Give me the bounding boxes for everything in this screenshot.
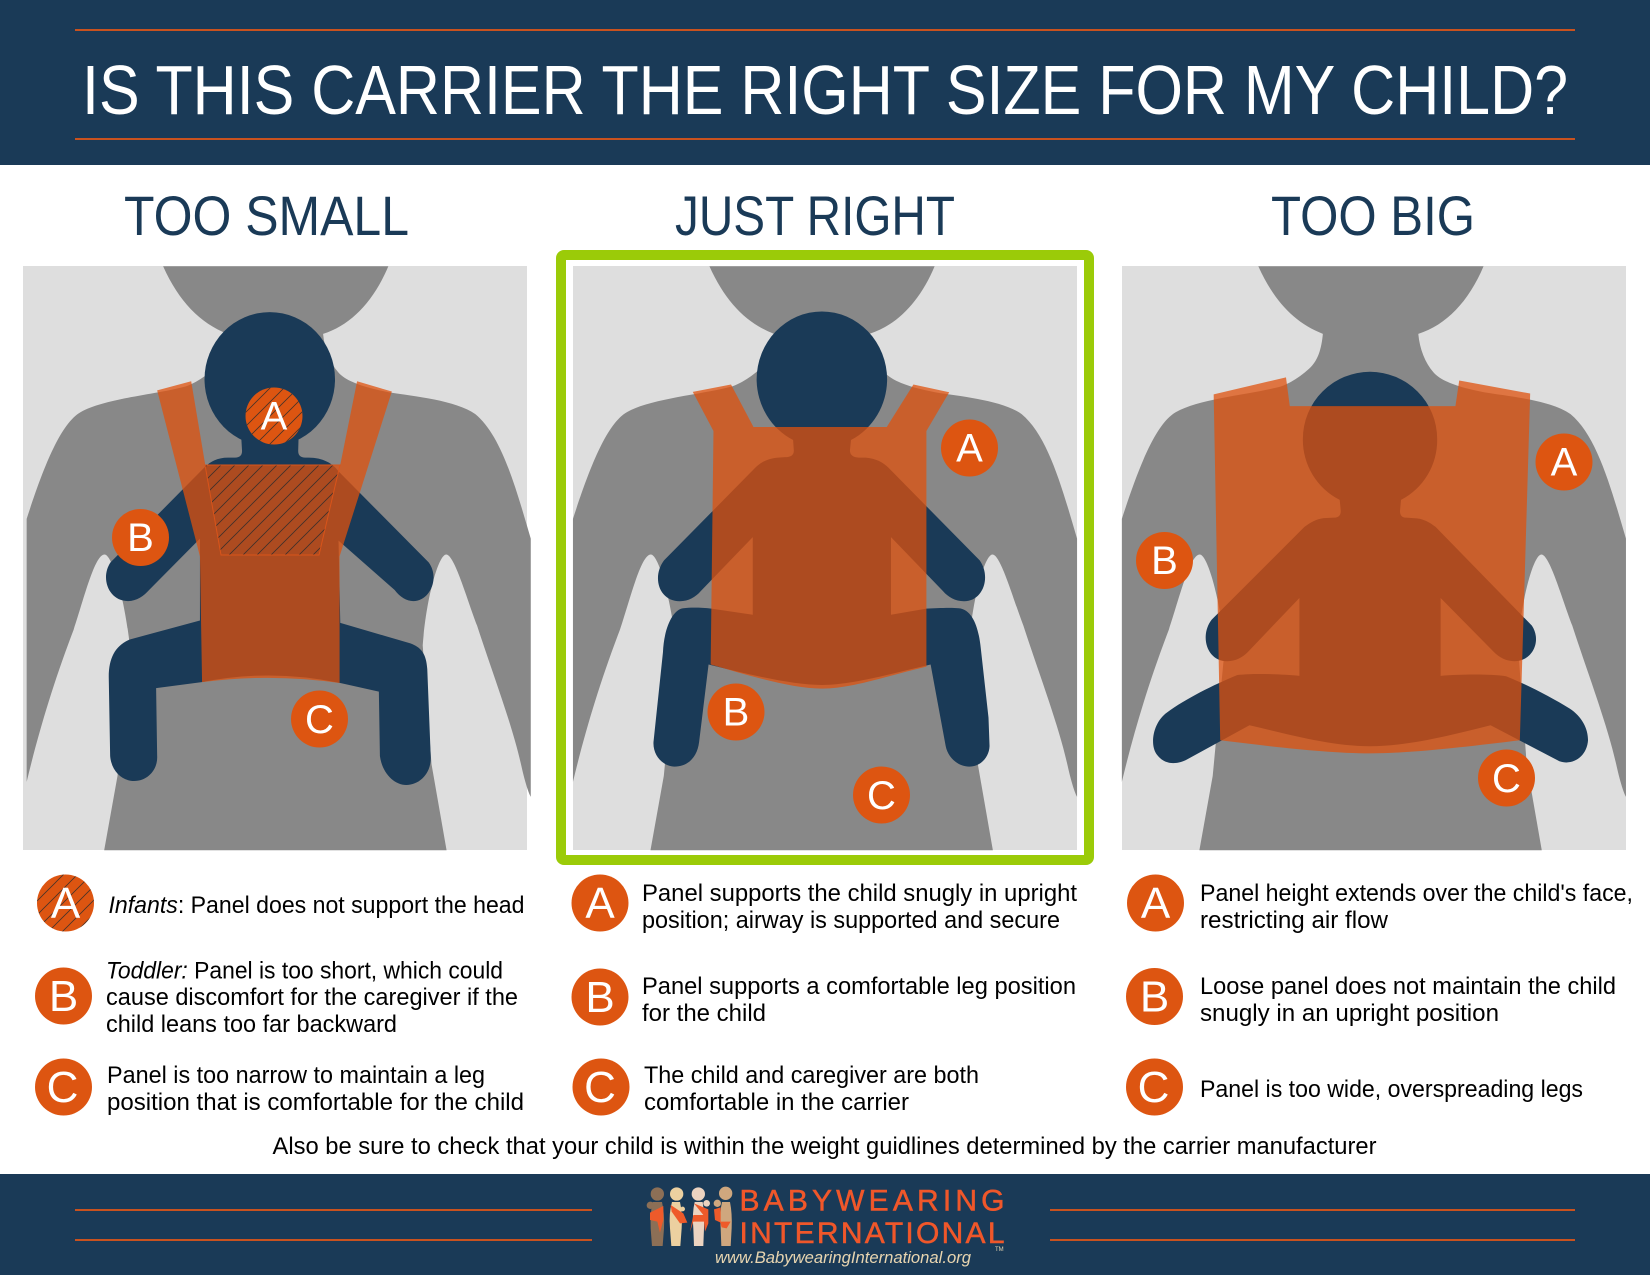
item B (572, 968, 628, 1026)
heading: too big: TOO BIG (1271, 184, 1475, 247)
item C (1126, 1058, 1183, 1116)
carrier panel too big (1214, 377, 1530, 753)
item C: C (1138, 1063, 1169, 1112)
text C: comfortable in the carrier (644, 1089, 909, 1116)
marker A (1536, 434, 1592, 490)
panel: too small illustration (23, 266, 531, 850)
logo url: www.BabywearingInternational.org (715, 1248, 972, 1267)
text B: child leans too far backward (106, 1011, 397, 1038)
hatched area: missing head support (205, 465, 340, 555)
text B: Panel supports a comfortable leg position (642, 973, 1076, 1000)
item A (37, 874, 94, 932)
note: weight guidelines: Also be sure to check that your child is within the weight guidlines determined by the carrier manufacturer (272, 1133, 1377, 1160)
panel: too big illustration (1122, 266, 1626, 850)
logo: TM (995, 1247, 1004, 1253)
text C (644, 1062, 979, 1116)
marker C (853, 766, 910, 824)
child figure (1153, 372, 1588, 763)
item B: B (49, 972, 78, 1021)
text B: Toddler: Panel is too short, which could (106, 958, 503, 984)
text B (642, 973, 1076, 1027)
item A (1127, 874, 1184, 932)
text C: Panel is too wide, overspreading legs (1200, 1076, 1583, 1103)
marker A: A (956, 426, 983, 470)
child figure (106, 312, 434, 785)
caregiver silhouette (573, 266, 1077, 850)
text C: Panel is too narrow to maintain a leg (107, 1062, 485, 1089)
text A: restricting air flow (1200, 907, 1389, 934)
text A (1200, 880, 1633, 934)
green highlight frame (561, 255, 1089, 860)
item C (35, 1058, 92, 1116)
item C: C (47, 1063, 78, 1112)
caregiver silhouette (1122, 266, 1626, 850)
marker A (941, 420, 998, 476)
text B: Loose panel does not maintain the child (1200, 973, 1616, 1000)
item B (35, 968, 92, 1024)
text B (1200, 973, 1616, 1027)
marker A (246, 388, 302, 444)
child and carrier (1153, 372, 1588, 763)
marker B (708, 684, 764, 740)
text A: Infants: Panel does not support the head (108, 892, 524, 919)
child and carrier (106, 312, 434, 785)
marker C (291, 690, 348, 748)
text B (106, 958, 518, 1038)
item B: B (585, 973, 615, 1022)
logo: INTERNATIONAL (740, 1217, 1004, 1250)
marker B: B (723, 690, 749, 734)
header banner (0, 0, 1650, 165)
carrier panel just right (693, 385, 949, 689)
legend: too big (1126, 874, 1633, 1116)
text A: position; airway is supported and secure (642, 907, 1060, 934)
carrier panel too small (157, 381, 392, 683)
item A: A (585, 879, 615, 928)
child figure (653, 311, 990, 767)
marker B (112, 509, 169, 566)
marker B: B (127, 516, 154, 560)
text A: Panel height extends over the child's face, (1200, 880, 1633, 907)
logo text: BABYWEARING (740, 1184, 1004, 1218)
text A (642, 880, 1077, 934)
text C: position that is comfortable for the child (107, 1089, 524, 1116)
marker C: C (305, 698, 334, 742)
legend: too small (35, 874, 524, 1116)
marker C: C (867, 774, 896, 818)
icon: carrying figures (647, 1187, 732, 1246)
heading: too small: TOO SMALL (124, 184, 409, 247)
logo (647, 1184, 1004, 1267)
marker B (1136, 532, 1193, 589)
panel: just right illustration (561, 255, 1089, 860)
item A (572, 874, 628, 932)
item A: A (1141, 879, 1171, 928)
item B (1126, 968, 1183, 1025)
text A: Panel supports the child snugly in upright (642, 880, 1077, 907)
child and carrier (653, 311, 990, 767)
text C: The child and caregiver are both (644, 1062, 979, 1089)
marker B: B (1151, 539, 1178, 583)
text B: for the child (642, 1000, 766, 1027)
text C (107, 1062, 524, 1116)
item B: B (1140, 972, 1169, 1022)
item C: C (584, 1063, 616, 1112)
text B: snugly in an upright position (1200, 1000, 1499, 1027)
marker A: A (261, 394, 288, 438)
legend: just right (572, 874, 1077, 1116)
footer banner (0, 1174, 1650, 1275)
item A: A (51, 879, 81, 928)
marker C (1478, 750, 1535, 806)
caregiver silhouette (27, 266, 531, 850)
heading: just right: JUST RIGHT (675, 184, 955, 247)
marker C: C (1492, 757, 1521, 801)
text B: cause discomfort for the caregiver if the (106, 984, 518, 1011)
item C (572, 1058, 630, 1116)
marker A: A (1551, 440, 1578, 484)
